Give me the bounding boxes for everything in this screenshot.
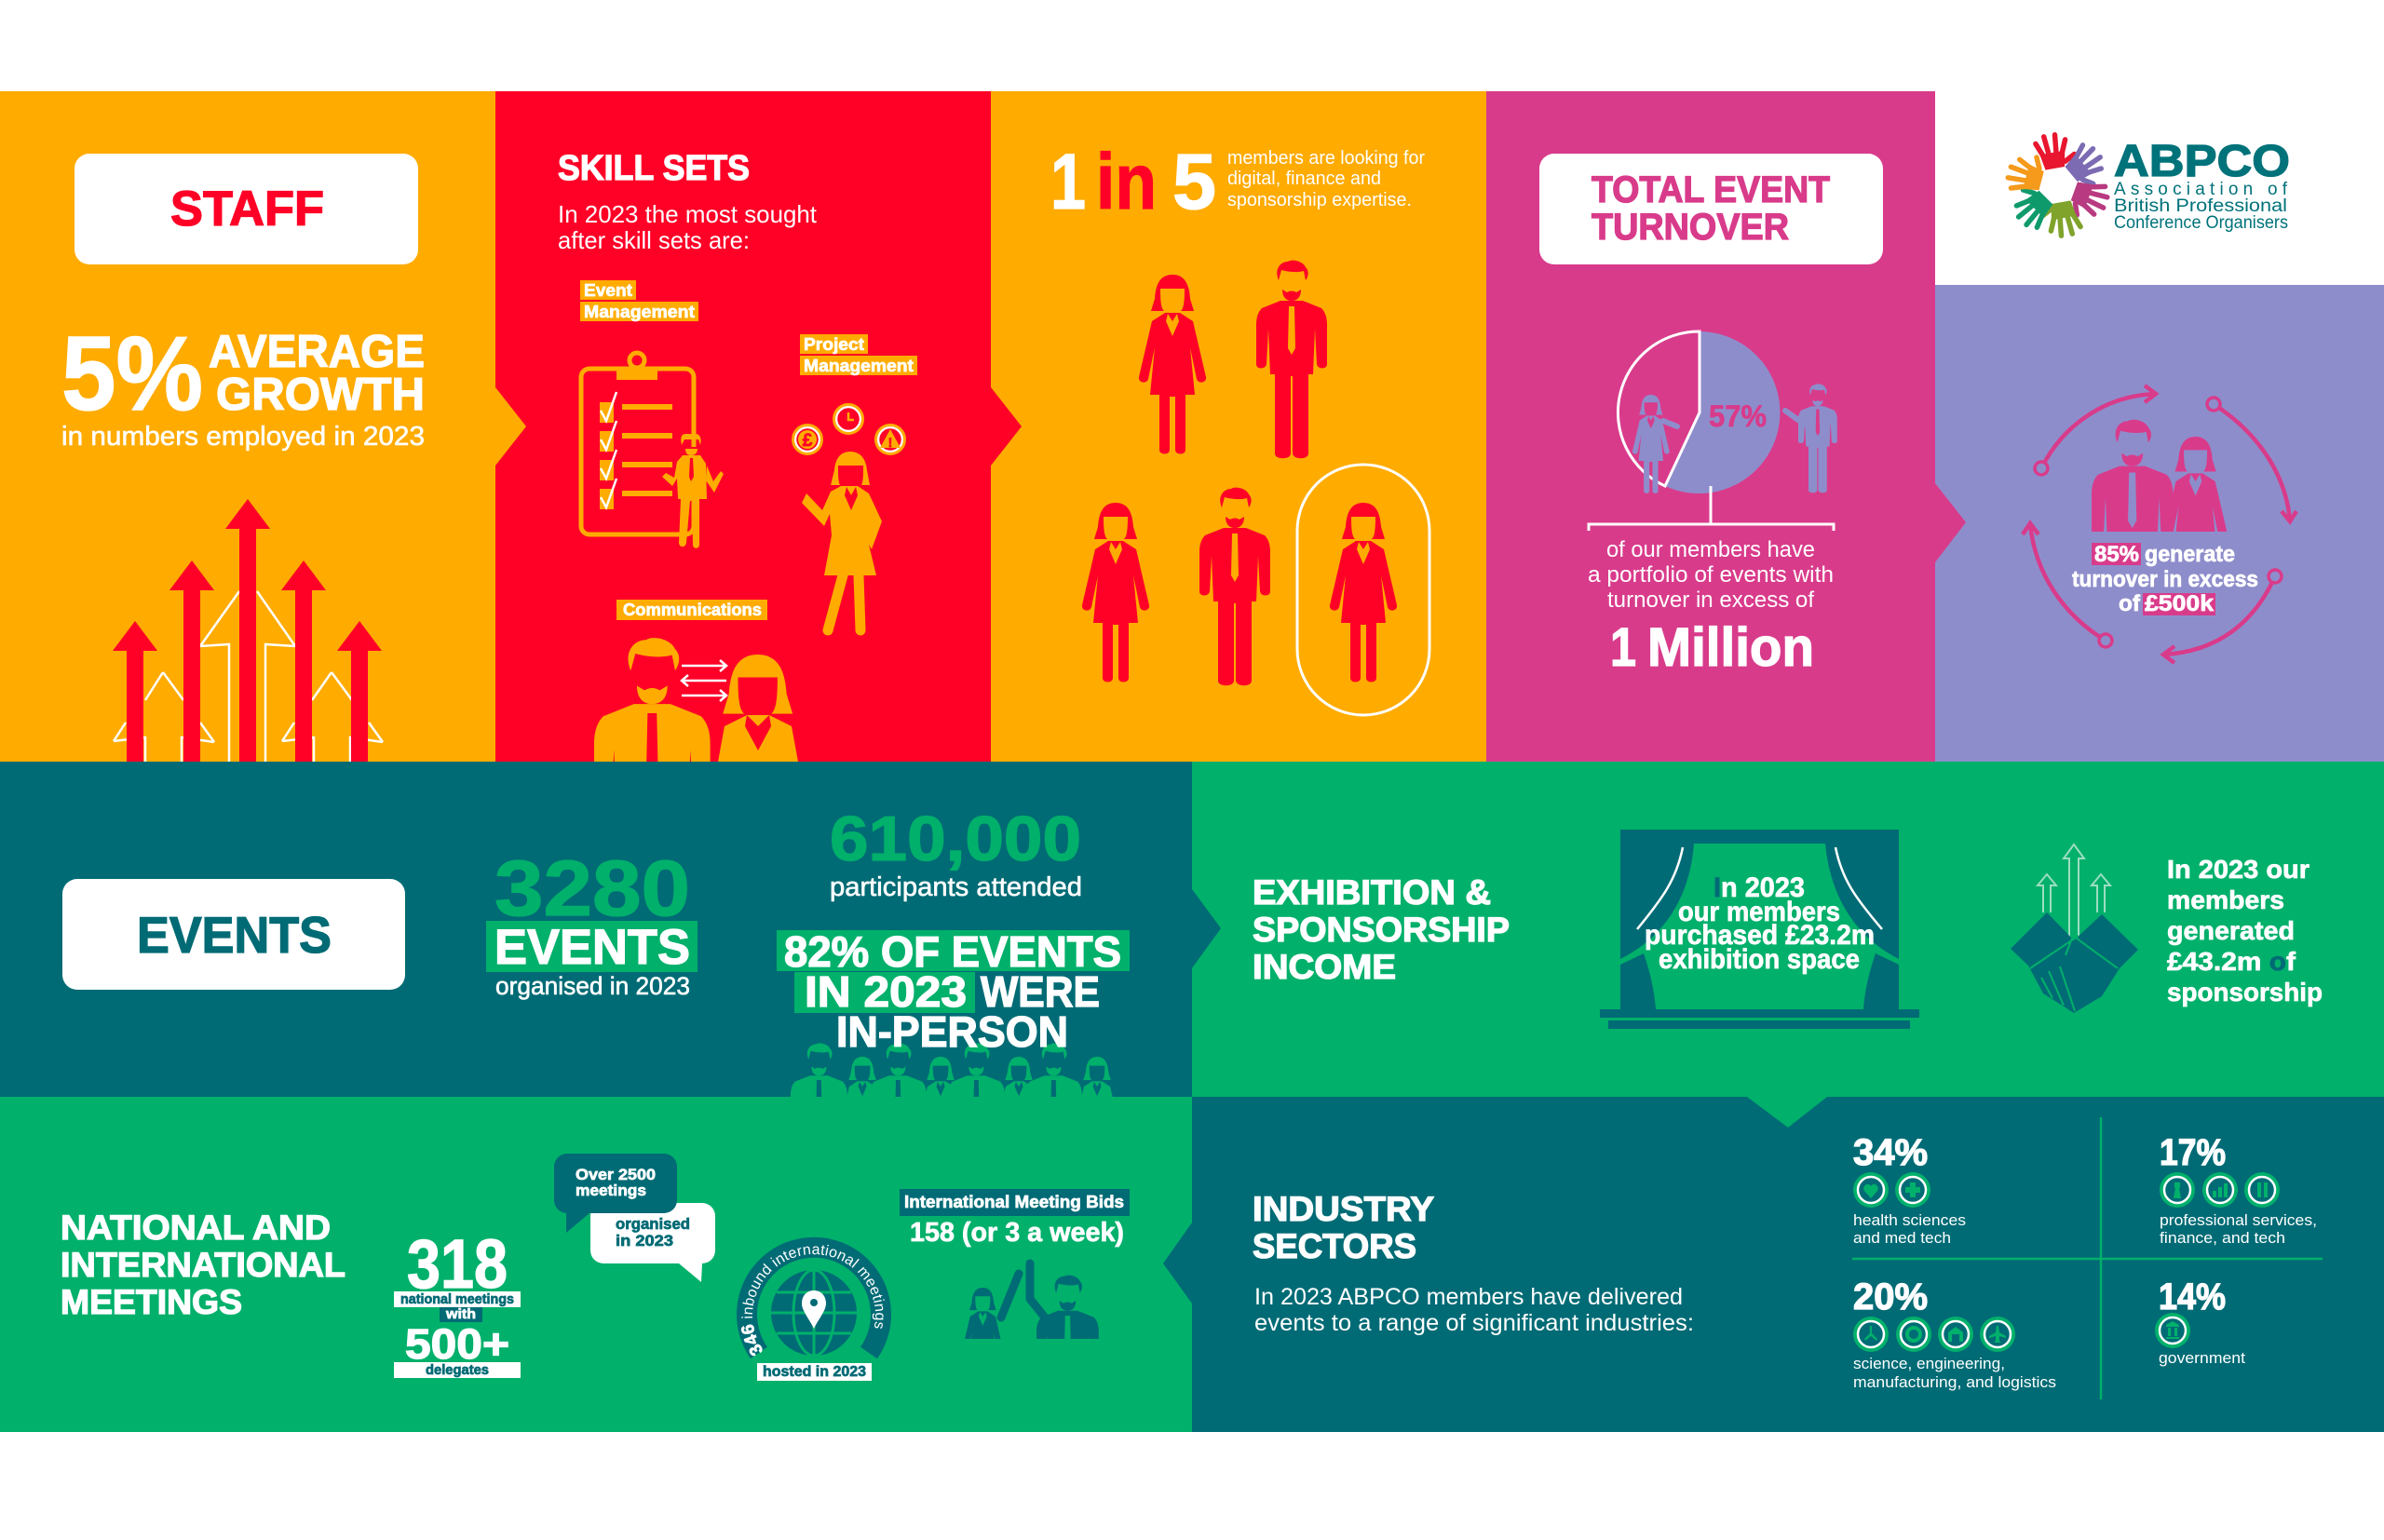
speech bubble: organised in 2023: organised xyxy=(616,1215,690,1233)
sector: 20% science and engineering: 20% xyxy=(1853,1277,1928,1317)
label: project management: Management xyxy=(804,357,914,375)
crowd of people xyxy=(791,1043,1113,1097)
stat: 5% average growth: GROWTH xyxy=(216,370,425,420)
arrow: skill sets to 1 in 5 xyxy=(991,387,1022,466)
speech bubble: over 2500 meetings: meetings xyxy=(576,1182,646,1199)
icon: two members xyxy=(2092,419,2228,532)
stat: 5% average growth: 5% xyxy=(61,315,203,432)
logo: ABPCO xyxy=(2006,132,2290,238)
pictogram: five people xyxy=(1082,261,1429,715)
stat: 610,000 participants xyxy=(830,804,1082,902)
sector: 14% government: 14% xyxy=(2159,1277,2226,1317)
stat: 610,000 participants: participants attended xyxy=(830,872,1082,902)
stat: 3280 events xyxy=(486,844,698,1000)
sector: 20% science and engineering xyxy=(1853,1277,2056,1391)
logo wordmark: Association of xyxy=(2114,180,2288,199)
turnover description: of our members have xyxy=(1606,537,1815,562)
globe badge: 346 inbound meetings: hosted in 2023 xyxy=(763,1364,866,1380)
pie chart: 57%: 57% xyxy=(1709,399,1767,433)
sector: 17% professional services xyxy=(2160,1132,2317,1247)
stat: 85% generate: 85% xyxy=(2094,542,2139,567)
panel: exhibition and sponsorship income xyxy=(1192,762,2384,1097)
staff heading box xyxy=(74,154,418,264)
stat: 5% average growth: AVERAGE xyxy=(209,327,425,377)
stat: 5% average growth: in numbers employed in 2023 xyxy=(61,422,425,452)
sponsorship stat text: £43.2m of xyxy=(2167,947,2296,976)
icon: hands wheel xyxy=(2006,132,2110,238)
sector: 34% health sciences: 34% xyxy=(1853,1132,1928,1173)
skill sets intro xyxy=(558,200,818,254)
sectors heading: INDUSTRY xyxy=(1253,1190,1434,1228)
stat: 1 in 5: 5 xyxy=(1172,138,1216,225)
sponsorship stat text xyxy=(2167,855,2323,1006)
turnover description: a portfolio of events with xyxy=(1588,562,1834,588)
stat: 82% in-person: 82% OF EVENTS xyxy=(784,927,1121,976)
sector: 34% health sciences: and med tech xyxy=(1853,1229,1951,1247)
speech bubble: over 2500 meetings xyxy=(554,1154,677,1233)
sector: 17% professional services: 17% xyxy=(2160,1132,2226,1173)
speech bubble: over 2500 meetings: Over 2500 xyxy=(576,1166,656,1183)
stat: 1 in 5: in xyxy=(1096,138,1157,225)
arrow: turnover to 85% xyxy=(1935,483,1966,562)
icon: cycle arrows xyxy=(2023,385,2296,663)
sectors intro: In 2023 ABPCO members have delivered xyxy=(1254,1284,1683,1310)
sector: 34% health sciences xyxy=(1853,1132,1966,1247)
sector: 14% government xyxy=(2155,1277,2245,1367)
events heading box xyxy=(62,879,405,990)
sector: 34% health sciences: health sciences xyxy=(1853,1211,1966,1229)
stat: 318 national meetings: 318 xyxy=(407,1225,508,1303)
icon: woman juggling project concerns: £ xyxy=(803,431,813,451)
icon: handshake with arrows xyxy=(2011,844,2138,1013)
panel: total event turnover xyxy=(1486,91,1935,762)
speech bubble: organised in 2023: in 2023 xyxy=(616,1232,673,1250)
stat: 1 million: Million xyxy=(1647,617,1814,678)
stat: 3280 events: EVENTS xyxy=(494,920,690,975)
panel: 1 in 5 xyxy=(991,91,1486,762)
label: communications: Communications xyxy=(623,601,762,619)
globe badge: 346 inbound meetings: 346 inbound international meetings xyxy=(741,1244,885,1356)
stat: 3280 events: 3280 xyxy=(494,844,690,932)
meetings heading: INTERNATIONAL xyxy=(61,1246,345,1284)
stat: 318 national meetings: with xyxy=(445,1306,476,1322)
stat: 318 national meetings: national meetings xyxy=(400,1291,514,1307)
sponsorship stat text: In 2023 our xyxy=(2167,855,2310,884)
logo wordmark: ABPCO xyxy=(2114,137,2290,186)
1 in 5 description: members are looking for xyxy=(1227,148,1425,169)
1 in 5 description: digital, finance and xyxy=(1227,169,1381,189)
meetings heading: NATIONAL AND xyxy=(61,1209,331,1247)
stat: 82% in-person: IN-PERSON xyxy=(836,1007,1068,1056)
logo wordmark: British Professional xyxy=(2114,196,2287,216)
exhibition stat text: In 2023 xyxy=(1714,872,1805,903)
sponsorship stat text: sponsorship xyxy=(2167,978,2323,1006)
sectors intro: events to a range of significant industries: xyxy=(1254,1310,1694,1336)
panel: staff xyxy=(0,91,495,762)
label: event management: Management xyxy=(584,303,695,321)
1 in 5 description xyxy=(1227,148,1425,210)
sector: 17% professional services: finance, and tech xyxy=(2160,1229,2285,1247)
stat: 85% generate: generate xyxy=(2145,542,2235,567)
stat: 5% average growth xyxy=(61,315,425,452)
icon: growth arrows xyxy=(113,499,383,762)
exhibition heading xyxy=(1253,873,1510,986)
stat: 318 national meetings xyxy=(394,1225,521,1378)
staff heading box: STAFF xyxy=(170,182,324,236)
stat: 85% generate xyxy=(2072,542,2258,616)
turnover heading box: TOTAL EVENT xyxy=(1592,169,1830,210)
turnover heading box xyxy=(1539,154,1883,264)
exhibition stat text xyxy=(1645,872,1875,975)
skill sets intro: after skill sets are: xyxy=(558,226,750,254)
turnover description xyxy=(1588,537,1834,613)
icon: clipboard with man xyxy=(581,353,724,548)
skill sets intro: In 2023 the most sought xyxy=(558,200,818,228)
icon: woman juggling project concerns xyxy=(793,404,905,630)
sector: 17% professional services: professional services, xyxy=(2160,1211,2317,1229)
exhibition heading: INCOME xyxy=(1253,948,1396,986)
exhibition heading: SPONSORSHIP xyxy=(1253,911,1510,949)
events heading box: EVENTS xyxy=(137,906,332,964)
icon: stage with curtains xyxy=(1600,830,1919,1029)
panel: national and international meetings xyxy=(0,1097,1192,1432)
stat: 1 in 5 xyxy=(1050,138,1216,225)
sector: 14% government: government xyxy=(2159,1349,2245,1367)
skill sets heading: SKILL SETS xyxy=(558,149,750,188)
logo wordmark: Conference Organisers xyxy=(2114,213,2288,233)
panel: turnover over 500k xyxy=(1935,285,2384,762)
panel: skill sets xyxy=(495,91,991,762)
stat: 82% in-person: WERE xyxy=(981,967,1100,1016)
sponsorship stat text: members xyxy=(2167,885,2284,914)
1 in 5 description: sponsorship expertise. xyxy=(1227,190,1412,210)
arrow: sponsorship to sectors xyxy=(1747,1097,1827,1128)
arrow: bids to sectors xyxy=(1163,1223,1192,1304)
meetings heading: MEETINGS xyxy=(61,1283,242,1321)
icon: woman juggling project concerns: ! xyxy=(888,435,892,450)
stat: 3280 events: organised in 2023 xyxy=(495,972,690,1000)
sector: 20% science and engineering: science, engineering, xyxy=(1853,1355,2005,1372)
stat: 85% generate: £500k xyxy=(2145,591,2215,616)
stat: 85% generate: turnover in excess xyxy=(2072,567,2258,592)
exhibition stat text: purchased £23.2m xyxy=(1645,920,1875,951)
international meeting bids: International Meeting Bids xyxy=(904,1193,1124,1211)
sectors heading xyxy=(1253,1190,1434,1265)
meetings heading xyxy=(61,1209,345,1321)
speech bubble: organised in 2023 xyxy=(590,1203,715,1282)
exhibition heading: EXHIBITION & xyxy=(1253,873,1491,912)
turnover description: turnover in excess of xyxy=(1607,588,1814,613)
icon: high five xyxy=(965,1259,1099,1339)
bracket xyxy=(1589,486,1834,531)
stat: 318 national meetings: 500+ xyxy=(405,1320,509,1368)
sectors intro xyxy=(1254,1284,1694,1336)
arrow: staff to skill sets xyxy=(495,387,526,466)
stat: 610,000 participants: 610,000 xyxy=(830,804,1081,874)
stat: 85% generate: of xyxy=(2119,591,2141,616)
stat: 1 million: 1 xyxy=(1610,617,1636,678)
label: project management: Project xyxy=(804,335,864,354)
turnover heading box: TURNOVER xyxy=(1592,207,1789,248)
label: event management: Event xyxy=(584,281,632,300)
stat: 1 in 5: 1 xyxy=(1050,138,1086,225)
logo wordmark xyxy=(2114,137,2290,233)
sector: 20% science and engineering: manufacturing, and logistics xyxy=(1853,1373,2056,1391)
international meeting bids xyxy=(900,1189,1130,1248)
stat: 82% in-person: IN 2023 xyxy=(805,967,967,1016)
exhibition stat text: our members xyxy=(1678,897,1840,927)
exhibition stat text: exhibition space xyxy=(1659,944,1860,975)
panel: industry sectors xyxy=(1163,1097,2384,1432)
panel: events xyxy=(0,762,1192,1097)
sectors heading: SECTORS xyxy=(1253,1227,1416,1265)
stat: 318 national meetings: delegates xyxy=(426,1362,489,1378)
arrow: events to exhibition xyxy=(1192,889,1221,968)
stat: 82% in-person xyxy=(777,927,1130,1056)
label: event management xyxy=(580,280,698,321)
icon: man and woman communicating xyxy=(594,638,798,762)
label: project management xyxy=(800,334,917,375)
pie chart: 57% xyxy=(1618,331,1837,493)
sponsorship stat text: generated xyxy=(2167,916,2295,945)
international meeting bids: 158 (or 3 a week) xyxy=(910,1218,1124,1248)
